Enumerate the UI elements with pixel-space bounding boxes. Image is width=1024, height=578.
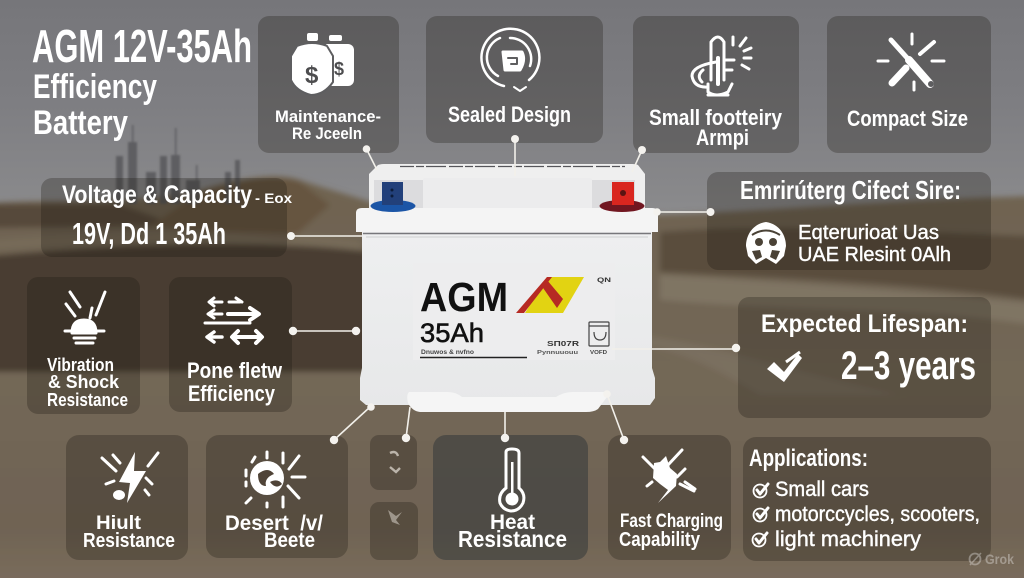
text: model code: Pynnuuouu bbox=[537, 350, 578, 356]
icon: thermometer bbox=[500, 449, 524, 511]
list item: small cars: Small cars bbox=[775, 478, 869, 501]
label: desert use bbox=[225, 512, 323, 552]
list item: light machinery: light machinery bbox=[775, 528, 922, 551]
icon: broken bolt bbox=[643, 450, 695, 503]
label: compact size: Compact Size bbox=[847, 106, 968, 131]
text: climate details: Eqterurioat Uas bbox=[798, 222, 939, 244]
connector: voltage to battery bbox=[287, 232, 362, 240]
connector: lifespan to battery bbox=[612, 344, 740, 352]
text: climate details bbox=[798, 222, 951, 266]
label: power flow bbox=[187, 358, 283, 406]
text: ON mark: QN bbox=[597, 277, 611, 284]
watermark: Grok bbox=[970, 551, 1014, 567]
battery centre cap bbox=[423, 178, 592, 212]
label: maintenance: Re Jceeln bbox=[292, 124, 362, 143]
panel: power flow efficiency bbox=[169, 277, 292, 412]
icon: lightning burst bbox=[102, 452, 158, 503]
icon: desert sun bbox=[246, 452, 305, 507]
panel: sealed design bbox=[426, 16, 603, 143]
list item: motorcycles: motorccycles, scooters, bbox=[775, 503, 980, 526]
connector: small footprint to battery bbox=[632, 146, 646, 172]
icon: mask bbox=[746, 222, 786, 264]
icon: money bags: $ bbox=[305, 62, 319, 89]
title: Battery bbox=[33, 104, 128, 142]
negative terminal bbox=[370, 182, 416, 212]
text: fine print: Dnuwos & nvfno bbox=[421, 350, 474, 356]
icon: vibration bbox=[65, 292, 105, 343]
battery bbox=[356, 164, 658, 412]
panel: desert use bbox=[206, 435, 348, 558]
label: vibration bbox=[47, 355, 128, 410]
panel: fast charging bbox=[608, 435, 731, 560]
label: lifespan heading: Expected Lifespan: bbox=[761, 310, 968, 338]
text: 35Ah: 35Ah bbox=[420, 318, 484, 348]
panel: small blank tile upper bbox=[370, 435, 417, 490]
logo: yellow and red chevron bbox=[516, 277, 584, 313]
label: climate heading: Emrirúterg Cifect Sire: bbox=[740, 175, 961, 205]
text: model code bbox=[537, 341, 607, 356]
text: AGM: AGM bbox=[420, 274, 508, 320]
icon: faded mark bbox=[390, 452, 400, 472]
icon: sealed ring bbox=[481, 29, 539, 91]
connector: fast charging to battery bbox=[603, 390, 628, 444]
panel: small blank tile lower bbox=[370, 502, 418, 560]
panel: heat resistance small bbox=[66, 435, 188, 560]
watermark: Grok: Grok bbox=[985, 551, 1014, 567]
battery shoulder bbox=[356, 208, 658, 232]
label: small footprint bbox=[649, 105, 783, 150]
label: fast charging: Capability bbox=[619, 529, 701, 551]
title bbox=[32, 20, 252, 142]
label: sealed design: Sealed Design bbox=[448, 102, 571, 127]
icon: label symbol bbox=[589, 322, 609, 346]
label: small footprint: Small footteiry bbox=[649, 105, 783, 130]
label: desert use: Desert /v/ bbox=[225, 512, 323, 535]
label: voltage heading: - Eox bbox=[255, 190, 292, 206]
icon: money bags: $ bbox=[334, 59, 344, 79]
panel: expected lifespan bbox=[738, 297, 991, 418]
battery top lid bbox=[369, 164, 645, 212]
label: small footprint: Armpi bbox=[696, 125, 749, 150]
panel: climate fit bbox=[707, 172, 991, 270]
value: lifespan: 2–3 years bbox=[841, 344, 976, 388]
skyline silhouette bbox=[116, 125, 240, 204]
positive terminal bbox=[600, 182, 644, 212]
label: desert use: Beete bbox=[264, 529, 315, 552]
label: fast charging bbox=[619, 511, 723, 551]
connector: desert to battery bbox=[330, 403, 375, 444]
battery body bbox=[360, 232, 655, 405]
label: hiult resistance: Resistance bbox=[83, 530, 175, 552]
icon: money bags bbox=[291, 33, 354, 95]
text: climate details: UAE Rlesint 0Alh bbox=[798, 244, 951, 266]
label: vibration: Resistance bbox=[47, 390, 128, 410]
text: model code: SП07R bbox=[547, 341, 579, 348]
title: AGM 12V-35Ah bbox=[32, 20, 252, 72]
value: voltage: 19V, Dd 1 35Ah bbox=[72, 216, 226, 251]
title: Efficiency bbox=[33, 68, 157, 106]
connector: sealed to battery bbox=[511, 135, 519, 176]
panel: small footprint bbox=[633, 16, 799, 153]
label: power flow: Pone fletw bbox=[187, 358, 283, 383]
panel: heat resistance bbox=[433, 435, 588, 560]
panel: maintenance-free bbox=[258, 16, 399, 153]
icon: crossed tools bbox=[878, 34, 944, 90]
text: model code: VOFD bbox=[590, 350, 607, 356]
label: maintenance bbox=[275, 107, 381, 143]
panel: vibration and shock bbox=[27, 277, 140, 414]
label: power flow: Efficiency bbox=[188, 381, 276, 406]
label: maintenance: Maintenance- bbox=[275, 107, 381, 126]
label: voltage heading: Voltage & Capacity bbox=[62, 181, 252, 209]
product label bbox=[413, 263, 615, 360]
label: fast charging: Fast Charging bbox=[620, 511, 723, 532]
icon: thermometer hand bbox=[692, 37, 751, 95]
icon: flow arrows bbox=[205, 298, 262, 343]
battery recesses bbox=[374, 180, 635, 208]
label: heat resistance bbox=[458, 511, 567, 552]
label: vibration: Vibration bbox=[47, 355, 114, 375]
label: heat resistance: Heat bbox=[490, 511, 535, 534]
label: hiult resistance bbox=[83, 513, 175, 552]
connector: small tile to battery bbox=[402, 407, 410, 442]
label: applications heading: Applications: bbox=[749, 445, 868, 472]
connector: climate to battery bbox=[653, 208, 714, 216]
icon: double check bbox=[767, 352, 802, 382]
panel: compact size bbox=[827, 16, 991, 153]
connector: power flow to battery bbox=[289, 327, 360, 335]
connector: heat to battery bbox=[501, 412, 509, 442]
label: heat resistance: Resistance bbox=[458, 526, 567, 552]
label: vibration: & Shock bbox=[48, 372, 120, 392]
panel: voltage and capacity bbox=[41, 178, 292, 257]
panel: applications bbox=[743, 437, 991, 561]
connector: maintenance to battery bbox=[363, 145, 377, 170]
battery bottom tray bbox=[407, 392, 607, 412]
icon: faded mark bbox=[388, 510, 402, 525]
label: hiult resistance: Hiult bbox=[96, 513, 142, 534]
